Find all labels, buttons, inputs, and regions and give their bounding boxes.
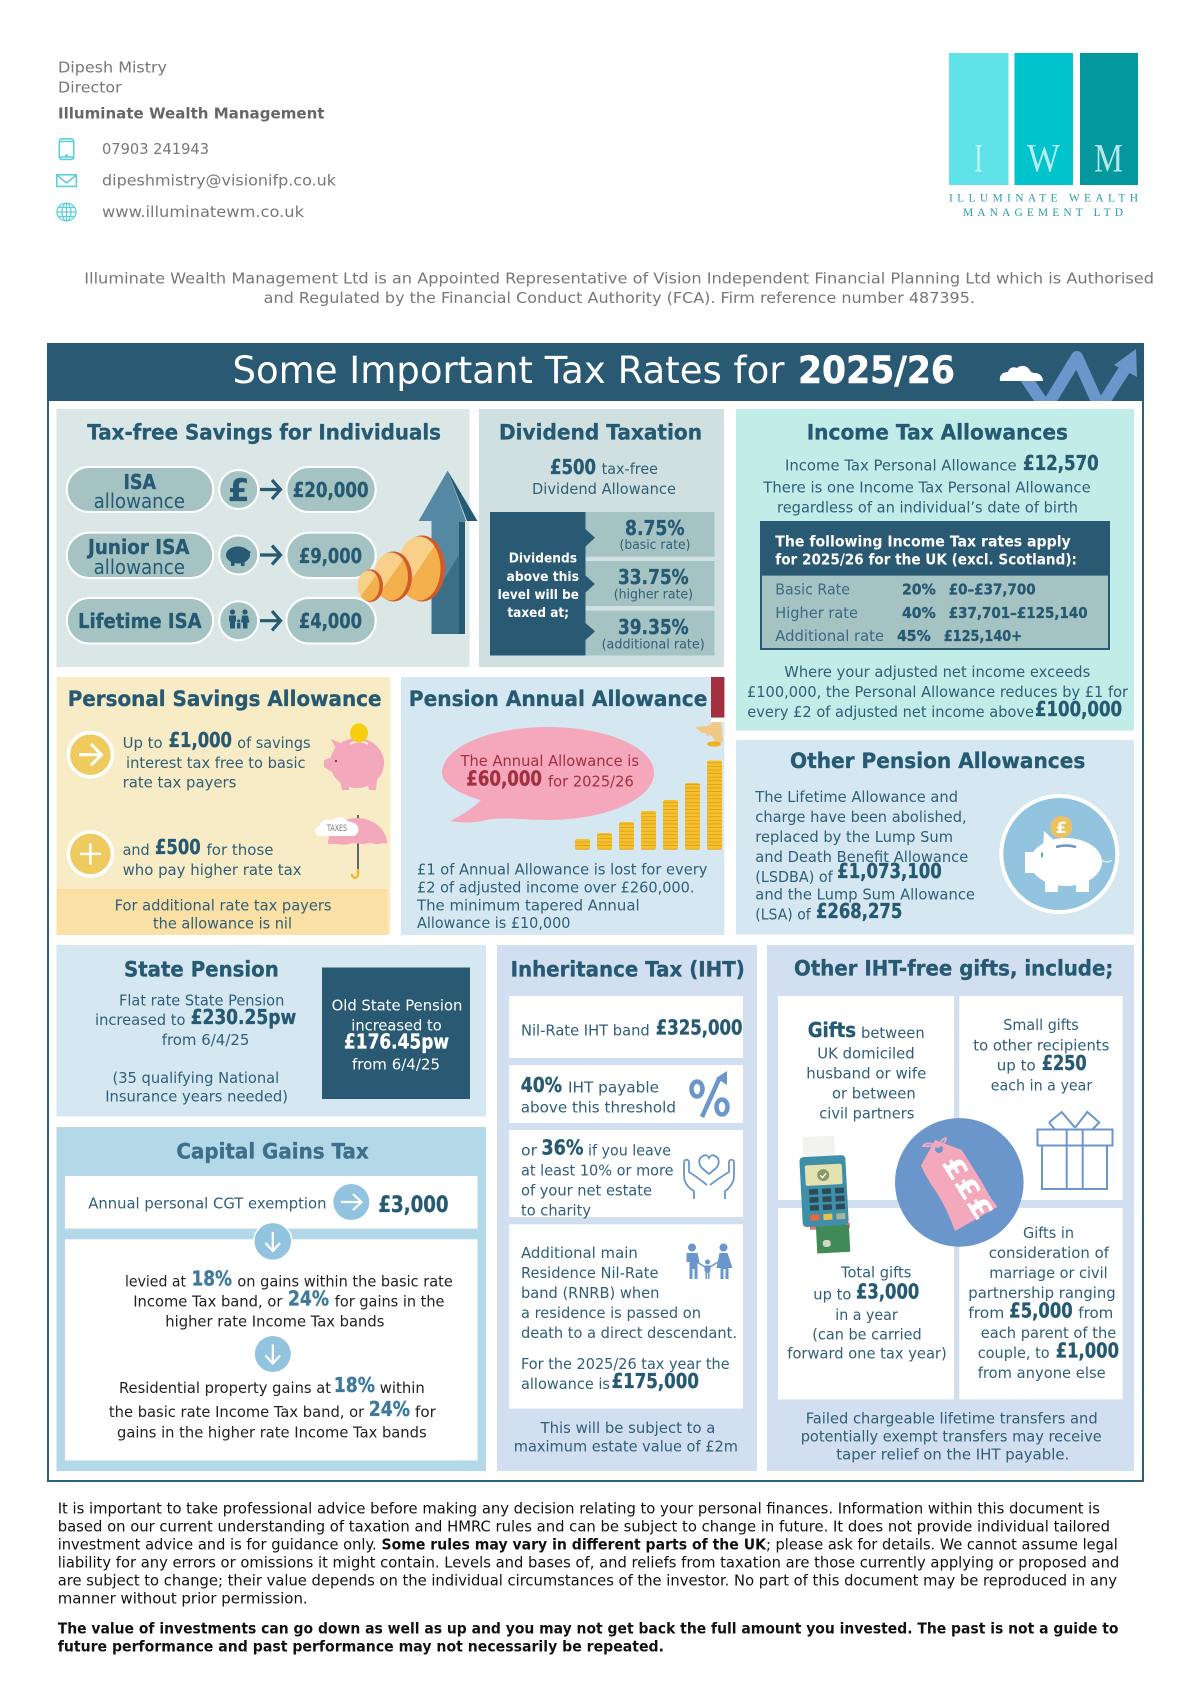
36 percent box: to charity bbox=[521, 1201, 591, 1219]
dividend rates: (higher rate) bbox=[614, 587, 693, 603]
marriage gifts text: from bbox=[1078, 1304, 1113, 1322]
flat rate text: £230.25pw bbox=[191, 1005, 296, 1029]
coin stacks chart bbox=[575, 760, 722, 850]
flat rate text: Insurance years needed) bbox=[105, 1087, 288, 1105]
risk warning: The value of investments can go down as well as up and you may not get back the full amount you invested. The past is not a guide to bbox=[58, 1619, 1119, 1637]
title bar: 2025/26 bbox=[798, 348, 955, 392]
logo: I bbox=[974, 136, 982, 181]
additional rate strip: For additional rate tax payers bbox=[115, 896, 331, 914]
icon: card reader bbox=[798, 1135, 851, 1254]
small gifts text: each in a year bbox=[991, 1076, 1093, 1094]
dividend label: above this bbox=[506, 569, 579, 585]
total gifts text: in a year bbox=[835, 1306, 898, 1324]
small gifts text: Small gifts bbox=[1003, 1016, 1079, 1034]
speech bubble: for 2025/26 bbox=[548, 772, 634, 790]
CGT exemption box bbox=[65, 1176, 478, 1229]
dividend label: Dividends bbox=[509, 550, 577, 566]
flat rate text: Flat rate State Pension bbox=[119, 991, 284, 1009]
income tax rates table: Basic Rate bbox=[775, 581, 850, 599]
savings text: interest tax free to basic bbox=[126, 754, 306, 772]
CGT rates box: within bbox=[380, 1379, 425, 1397]
taper relief note: potentially exempt transfers may receive bbox=[801, 1428, 1102, 1446]
dividend rates: 33.75% bbox=[618, 565, 689, 589]
CGT rates box: on gains within the basic rate bbox=[237, 1272, 453, 1290]
annual allowance note: £1 of Annual Allowance is lost for every bbox=[417, 860, 707, 878]
CGT rates box: for gains in the bbox=[335, 1292, 444, 1310]
panel: personal savings allowance bbox=[56, 677, 390, 935]
icon: phone bbox=[59, 139, 74, 159]
personal allowance text: Income Tax Personal Allowance bbox=[785, 457, 1017, 475]
icon: umbrella and cloud bbox=[315, 815, 387, 878]
icon: arrow circle bbox=[68, 733, 112, 777]
heading: Income Tax Allowances bbox=[807, 421, 1068, 446]
taper note: £100,000 bbox=[1035, 697, 1122, 721]
heading: Inheritance Tax (IHT) bbox=[511, 957, 745, 982]
total gifts text: Total gifts bbox=[840, 1264, 911, 1282]
income tax rates table: Additional rate bbox=[775, 627, 884, 645]
marriage gifts text: each parent of the bbox=[981, 1324, 1116, 1342]
icon: family bbox=[686, 1244, 732, 1279]
disclaimer: liability for any errors or omissions it might contain. Levels and bases of, and reliefs from taxation are those currently applying or proposed and bbox=[58, 1553, 1119, 1571]
income tax rates table: for 2025/26 for the UK (excl. Scotland): bbox=[775, 550, 1077, 568]
dividend label: level will be bbox=[498, 587, 579, 603]
total gifts text bbox=[787, 1264, 947, 1362]
logo: W bbox=[1027, 136, 1060, 181]
flat rate text: increased to bbox=[95, 1011, 186, 1029]
spouse gifts text: between bbox=[861, 1024, 925, 1042]
speech bubble: The Annual Allowance is bbox=[460, 752, 639, 770]
icon: pink piggy bank bbox=[324, 724, 384, 790]
speech bubble: £60,000 bbox=[466, 767, 542, 791]
icon: down arrow 1 bbox=[254, 1222, 292, 1260]
RNRB box: For the 2025/26 tax year the bbox=[521, 1355, 730, 1373]
CGT rates box: 18% bbox=[334, 1373, 375, 1397]
old state pension box: increased to bbox=[351, 1016, 442, 1034]
RNRB box: a residence is passed on bbox=[521, 1304, 701, 1322]
icon: globe bbox=[57, 203, 76, 221]
36 percent box bbox=[509, 1130, 743, 1219]
pill labels: £4,000 bbox=[299, 609, 362, 633]
RNRB box: allowance is bbox=[521, 1375, 610, 1393]
disclaimer: based on our current understanding of taxation and HMRC rules and can be subject to change in future. It does not provide individual tailored bbox=[58, 1517, 1110, 1535]
small gifts text: to other recipients bbox=[973, 1036, 1109, 1054]
regulatory statement bbox=[84, 270, 1154, 307]
dividend label bbox=[498, 550, 579, 621]
36 percent box: at least 10% or more bbox=[521, 1161, 674, 1179]
panel: state pension bbox=[56, 945, 486, 1116]
RNRB box: band (RNRB) when bbox=[521, 1284, 659, 1302]
estate value note: maximum estate value of £2m bbox=[514, 1437, 738, 1455]
icon: price tag circle bbox=[895, 1118, 1024, 1247]
allowance pills bbox=[67, 467, 376, 644]
36 percent box: 36% bbox=[541, 1136, 584, 1160]
heading: Other Pension Allowances bbox=[790, 749, 1085, 774]
disclaimer bbox=[58, 1499, 1119, 1607]
icon: pound: £ bbox=[228, 473, 249, 509]
dividend allowance: Dividend Allowance bbox=[532, 480, 676, 498]
estate value note: This will be subject to a bbox=[540, 1419, 715, 1437]
title bar: Some Important Tax Rates for bbox=[232, 348, 785, 392]
taper note: every £2 of adjusted net income above bbox=[747, 703, 1034, 721]
personal allowance text: There is one Income Tax Personal Allowance bbox=[762, 478, 1091, 496]
logo: MANAGEMENT LTD bbox=[963, 207, 1123, 219]
income tax rates table: Higher rate bbox=[775, 604, 858, 622]
CGT rates box: Residential property gains at bbox=[119, 1379, 331, 1397]
title bar bbox=[49, 345, 1142, 401]
old state pension box bbox=[322, 968, 470, 1099]
icon: small pig bbox=[226, 546, 251, 566]
dividend rates bbox=[602, 516, 705, 653]
pension text: charge have been abolished, bbox=[755, 808, 967, 826]
annual allowance note bbox=[416, 860, 707, 932]
nil-rate band box: £325,000 bbox=[656, 1016, 742, 1040]
personal allowance text: regardless of an individual’s date of birth bbox=[777, 498, 1078, 516]
disclaimer: Some rules may vary in different parts of the UK bbox=[382, 1535, 767, 1553]
40 percent box bbox=[509, 1065, 743, 1123]
36 percent box: if you leave bbox=[588, 1141, 671, 1159]
CGT rates box: gains in the higher rate Income Tax bands bbox=[117, 1424, 427, 1442]
panel: pension annual allowance bbox=[401, 677, 724, 935]
arrows bbox=[260, 480, 280, 630]
income tax rates table: £125,140+ bbox=[944, 627, 1022, 645]
total gifts text: £3,000 bbox=[856, 1280, 919, 1304]
40 percent box: above this threshold bbox=[521, 1098, 676, 1116]
disclaimer: investment advice and is for guidance only. bbox=[58, 1535, 377, 1553]
pension text: and the Lump Sum Allowance bbox=[755, 885, 975, 903]
pension text: (LSA) of bbox=[755, 905, 811, 923]
spouse gifts text bbox=[806, 1018, 926, 1122]
risk warning: future performance and past performance may not necessarily be repeated. bbox=[58, 1637, 664, 1655]
pill labels: £20,000 bbox=[293, 478, 369, 502]
CGT rates box: for bbox=[415, 1403, 436, 1421]
savings text: £500 bbox=[155, 835, 201, 859]
pension text bbox=[754, 788, 975, 923]
pill labels: Junior ISA bbox=[86, 535, 190, 559]
CGT rates box: 18% bbox=[192, 1266, 232, 1290]
CGT rates box: the basic rate Income Tax band, or bbox=[109, 1403, 365, 1421]
regulatory statement: Illuminate Wealth Management Ltd is an Appointed Representative of Vision Independent Financial Planning Ltd which is Authorised bbox=[84, 270, 1154, 288]
icon: price tag circle: £££ bbox=[935, 1150, 998, 1226]
marriage gifts text: from bbox=[968, 1304, 1004, 1322]
annual allowance note: £2 of adjusted income over £260,000. bbox=[417, 878, 694, 896]
big up arrow bbox=[419, 471, 478, 634]
heading: Tax-free Savings for Individuals bbox=[87, 421, 441, 446]
personal allowance text: £12,570 bbox=[1023, 451, 1099, 475]
income tax rates table: 45% bbox=[897, 627, 931, 645]
dividend rates: (additional rate) bbox=[602, 637, 705, 653]
disclaimer: are subject to change; their value depends on the individual circumstances of the investor. No part of this document may be reproduced in any bbox=[58, 1571, 1117, 1589]
icon: plus circle bbox=[68, 832, 112, 876]
heading: Capital Gains Tax bbox=[176, 1140, 369, 1165]
pension text: The Lifetime Allowance and bbox=[754, 788, 958, 806]
marriage gifts text: consideration of bbox=[989, 1244, 1110, 1262]
savings text: Up to bbox=[123, 734, 163, 752]
dividend allowance bbox=[532, 455, 676, 498]
income tax rates table bbox=[760, 521, 1110, 649]
savings text: for those bbox=[206, 841, 274, 859]
nil-rate band box: Nil-Rate IHT band bbox=[521, 1021, 650, 1039]
contact details: dipeshmistry@visionifp.co.uk bbox=[102, 172, 336, 190]
income tax rates table: 40% bbox=[902, 604, 936, 622]
spouse gifts text: UK domiciled bbox=[817, 1044, 915, 1062]
icon: hands holding heart bbox=[684, 1155, 734, 1199]
spouse gifts text: Gifts bbox=[808, 1018, 856, 1042]
total gifts text: (can be carried bbox=[812, 1325, 922, 1343]
taper note bbox=[747, 663, 1129, 721]
RNRB box: death to a direct descendant. bbox=[521, 1324, 737, 1342]
contact details: Director bbox=[58, 79, 122, 97]
pension text: (LSDBA) of bbox=[755, 868, 833, 886]
heading: Dividend Taxation bbox=[499, 421, 702, 446]
heading: Pension Annual Allowance bbox=[409, 687, 707, 712]
contact details bbox=[58, 58, 336, 221]
additional rate strip bbox=[56, 889, 388, 935]
marriage gifts text: £1,000 bbox=[1056, 1338, 1119, 1362]
pill labels: ISA bbox=[124, 470, 156, 494]
icon: cloud bbox=[1000, 366, 1043, 381]
pill labels: £9,000 bbox=[299, 544, 362, 568]
marriage gifts text: marriage or civil bbox=[989, 1264, 1108, 1282]
RNRB box: Additional main bbox=[521, 1244, 638, 1262]
RNRB box bbox=[509, 1224, 743, 1409]
annual allowance note: The minimum tapered Annual bbox=[416, 896, 640, 914]
RNRB box: Residence Nil-Rate bbox=[521, 1264, 658, 1282]
spouse gifts text: husband or wife bbox=[806, 1064, 926, 1082]
old state pension box: £176.45pw bbox=[344, 1030, 449, 1054]
marriage gifts text: Gifts in bbox=[1023, 1224, 1074, 1242]
contact details: 07903 241943 bbox=[102, 140, 209, 158]
icon: down arrow 2 bbox=[255, 1336, 291, 1372]
savings text bbox=[123, 728, 310, 879]
40 percent box: 40% bbox=[521, 1073, 562, 1097]
panel: tax-free savings bbox=[56, 409, 478, 667]
CGT exemption box: £3,000 bbox=[378, 1193, 449, 1218]
40 percent box: IHT payable bbox=[568, 1078, 659, 1096]
pill labels bbox=[78, 470, 369, 633]
pill labels: allowance bbox=[94, 555, 185, 579]
pill labels: allowance bbox=[94, 489, 185, 513]
speech bubble bbox=[442, 727, 654, 822]
gift boxes bbox=[778, 996, 1123, 1399]
panel: other IHT-free gifts bbox=[767, 945, 1134, 1471]
panel: capital gains tax bbox=[56, 1127, 486, 1471]
outer frame bbox=[48, 344, 1143, 1481]
flat rate text: (35 qualifying National bbox=[112, 1069, 279, 1087]
flat rate text bbox=[95, 991, 296, 1105]
old state pension box: Old State Pension bbox=[332, 996, 462, 1014]
panel: dividend taxation bbox=[479, 409, 724, 667]
heading: Other IHT-free gifts, include; bbox=[794, 956, 1113, 982]
income tax rates table: £0–£37,700 bbox=[949, 581, 1036, 599]
taper note: £100,000, the Personal Allowance reduces by £1 for bbox=[747, 683, 1129, 701]
spouse gifts text: or between bbox=[832, 1084, 916, 1102]
icon: hand with coin bbox=[695, 677, 724, 747]
annual allowance note: Allowance is £10,000 bbox=[417, 914, 570, 932]
marriage gifts text: £5,000 bbox=[1009, 1298, 1073, 1322]
contact details: Illuminate Wealth Management bbox=[58, 105, 324, 123]
CGT rates box: higher rate Income Tax bands bbox=[165, 1312, 384, 1330]
income tax rates table: 20% bbox=[902, 581, 936, 599]
icon: mail bbox=[57, 175, 76, 186]
rate bands bbox=[490, 512, 714, 656]
dividend allowance: tax-free bbox=[602, 460, 658, 478]
marriage gifts text: from anyone else bbox=[978, 1364, 1106, 1382]
dividend rates: 39.35% bbox=[618, 615, 689, 639]
panel: other pension allowances bbox=[736, 740, 1134, 934]
CGT exemption box: Annual personal CGT exemption bbox=[88, 1195, 326, 1213]
icon: gift box bbox=[1038, 1112, 1112, 1189]
personal allowance text bbox=[762, 451, 1099, 516]
regulatory statement: and Regulated by the Financial Conduct Authority (FCA). Firm reference number 487395. bbox=[264, 289, 975, 307]
pension text: £268,275 bbox=[816, 899, 902, 923]
nil-rate band box bbox=[509, 996, 743, 1058]
contact details: Dipesh Mistry bbox=[58, 58, 167, 76]
taper relief note: Failed chargeable lifetime transfers and bbox=[806, 1410, 1098, 1428]
savings text: £1,000 bbox=[169, 728, 232, 752]
estate value note bbox=[514, 1419, 738, 1455]
icon: umbrella and cloud: TAXES bbox=[326, 824, 347, 834]
spouse gifts text: civil partners bbox=[819, 1104, 914, 1122]
taper relief note: taper relief on the IHT payable. bbox=[836, 1446, 1069, 1464]
disclaimer: ; please ask for details. We cannot assume legal bbox=[766, 1535, 1118, 1553]
taper relief note bbox=[801, 1410, 1102, 1464]
pension text: and Death Benefit Allowance bbox=[755, 848, 968, 866]
taper note: Where your adjusted net income exceeds bbox=[784, 663, 1090, 681]
pension text: replaced by the Lump Sum bbox=[755, 828, 953, 846]
total gifts text: up to bbox=[813, 1286, 851, 1304]
old state pension box: from 6/4/25 bbox=[352, 1055, 440, 1073]
dividend allowance: £500 bbox=[550, 455, 596, 479]
disclaimer: It is important to take professional advice before making any decision relating to your personal finances. Information within this document is bbox=[58, 1499, 1100, 1517]
coins bbox=[358, 536, 445, 602]
savings text: of savings bbox=[237, 734, 310, 752]
panel: income tax allowances bbox=[736, 409, 1134, 731]
marriage gifts text: partnership ranging bbox=[968, 1284, 1116, 1302]
small gifts text: £250 bbox=[1042, 1051, 1087, 1075]
additional rate strip: the allowance is nil bbox=[153, 915, 292, 933]
icon: piggy bank circle bbox=[1001, 796, 1117, 912]
icon: rising zigzag arrow bbox=[1026, 349, 1137, 408]
CGT rates box: Income Tax band, or bbox=[133, 1292, 283, 1310]
icon: family bbox=[229, 609, 250, 628]
flat rate text: from 6/4/25 bbox=[162, 1031, 249, 1049]
panel: inheritance tax bbox=[497, 945, 757, 1471]
savings text: who pay higher rate tax bbox=[123, 861, 302, 879]
small gifts text bbox=[973, 1016, 1109, 1094]
income tax rates table: £37,701–£125,140 bbox=[949, 604, 1088, 622]
CGT rates box: levied at bbox=[125, 1272, 186, 1290]
savings text: and bbox=[123, 841, 150, 859]
icon: piggy bank circle: £ bbox=[1056, 818, 1067, 837]
logo: M bbox=[1094, 136, 1123, 181]
heading: State Pension bbox=[124, 957, 279, 982]
pension text: £1,073,100 bbox=[837, 859, 942, 883]
marriage gifts text bbox=[968, 1224, 1119, 1382]
logo bbox=[949, 53, 1138, 219]
icon: percent bbox=[692, 1071, 728, 1117]
dividend rates: (basic rate) bbox=[620, 537, 690, 553]
dividend rates: 8.75% bbox=[625, 516, 685, 540]
savings text: rate tax payers bbox=[123, 774, 236, 792]
CGT rates box bbox=[65, 1239, 478, 1460]
disclaimer: manner without prior permission. bbox=[58, 1589, 308, 1607]
marriage gifts text: couple, to bbox=[978, 1344, 1050, 1362]
dividend label: taxed at; bbox=[507, 605, 569, 621]
logo: ILLUMINATE WEALTH bbox=[949, 193, 1138, 205]
risk warning bbox=[58, 1619, 1119, 1655]
total gifts text: forward one tax year) bbox=[787, 1344, 947, 1362]
CGT rates box: 24% bbox=[288, 1286, 329, 1310]
heading: Personal Savings Allowance bbox=[68, 687, 381, 712]
CGT rates box: 24% bbox=[369, 1397, 410, 1421]
income tax rates table: The following Income Tax rates apply bbox=[775, 532, 1071, 550]
36 percent box: or bbox=[521, 1141, 538, 1159]
small gifts text: up to bbox=[997, 1056, 1036, 1074]
pill labels: Lifetime ISA bbox=[78, 609, 202, 633]
36 percent box: of your net estate bbox=[521, 1181, 652, 1199]
RNRB box: £175,000 bbox=[612, 1369, 699, 1393]
contact details: www.illuminatewm.co.uk bbox=[102, 203, 304, 221]
